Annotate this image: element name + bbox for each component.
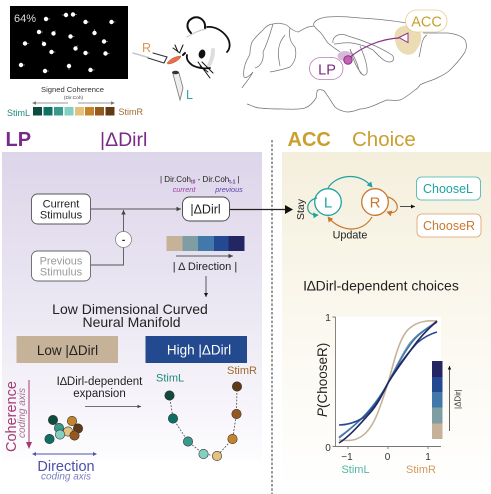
tick labels [325, 313, 431, 463]
formula [160, 175, 243, 194]
stimL label: StimL [341, 464, 370, 476]
signed coherence scale: StimL [7, 108, 30, 118]
manifold title: Neural Manifold [82, 314, 181, 330]
axes [332, 317, 441, 449]
chooseL box: ChooseL [423, 182, 473, 196]
direction axis: coding axis [41, 472, 91, 482]
arrow: current to delta [91, 208, 181, 210]
stay label: Stay [295, 198, 307, 220]
expansion label: I∆Dirl-dependent [57, 376, 143, 388]
curves [339, 321, 437, 443]
coherence axis [4, 380, 32, 452]
signed coherence scale: StimR [118, 107, 144, 117]
panel: ACC background [282, 152, 491, 494]
previous stimulus box: Previous [40, 256, 83, 268]
state R: R [370, 194, 381, 212]
formula: current [173, 185, 196, 194]
high delta box [146, 336, 247, 363]
tick labels: −1 [341, 452, 353, 463]
manifold title: Low Dimensional Curved [52, 301, 208, 317]
delta dir box [182, 197, 230, 221]
state diagram [295, 176, 397, 242]
arrow head into ACC [285, 205, 293, 214]
previous stimulus box [32, 251, 90, 281]
current stimulus box: Stimulus [40, 210, 83, 222]
arrow: direction [176, 255, 233, 257]
heading: delta dir: |ΔDirl [100, 129, 147, 151]
tick labels: 1 [425, 452, 431, 463]
legend arrow [448, 366, 450, 431]
arrow: L self loop [308, 198, 318, 215]
arrow: R self loop [387, 197, 397, 213]
panel: LP background [2, 152, 262, 460]
stimL label: StimL [156, 372, 184, 384]
legend colour bar [432, 361, 442, 439]
low delta box: Low |ΔDirl [37, 343, 98, 358]
LP label: LP [318, 62, 336, 78]
plot background [336, 317, 441, 446]
choices heading: I∆Dirl-dependent choices [303, 278, 459, 294]
heading: LP: LP [6, 129, 31, 151]
heading: Choice: Choice [352, 128, 416, 151]
low delta box [16, 336, 118, 363]
stimR label: StimR [227, 365, 257, 377]
delta dir box: |ΔDirl [190, 202, 221, 216]
expansion label [57, 376, 143, 406]
arrow: to manifold [205, 276, 207, 297]
legend label: |ΔDir| [454, 389, 462, 409]
label: L spout: L [186, 88, 193, 102]
current stimulus box [32, 194, 90, 224]
formula: - Dir.Coh [195, 175, 229, 184]
direction axis: Direction [37, 459, 95, 475]
label: R spout: R [142, 41, 151, 55]
LP to ACC projection [344, 33, 408, 64]
ACC label: ACC [411, 14, 442, 30]
LP label [310, 58, 343, 80]
formula: | Dir.Coh [160, 175, 191, 184]
formula: previous [214, 185, 243, 194]
expansion label: expansion [73, 388, 126, 400]
ACC region [395, 26, 421, 55]
minus node: - [122, 235, 125, 246]
current stimulus box: Current [43, 198, 79, 210]
arrow: to choices [400, 206, 415, 208]
signed coherence scale: (Dir.Coh) [64, 95, 83, 101]
chooseL box [416, 177, 480, 200]
ACC label [406, 10, 447, 32]
coherence axis: Coherence [4, 381, 20, 452]
state L: L [324, 194, 332, 212]
previous stimulus box: Stimulus [40, 266, 83, 278]
chooseR box: ChooseR [423, 219, 475, 233]
tick labels: 1 [325, 313, 331, 324]
tick labels: 0 [385, 452, 391, 463]
heading: ACC: ACC [288, 129, 331, 151]
arrow: L to R [328, 176, 372, 188]
random dot stimulus: 64% [14, 13, 36, 25]
arrow: delta dir to ACC [230, 208, 291, 210]
axis label: P(ChooseR) [315, 343, 330, 417]
formula: t0 [191, 180, 196, 186]
formula: t-1 [229, 180, 236, 186]
stimR label: StimR [406, 464, 436, 476]
coherence axis: coding axis [17, 388, 28, 438]
direction colour bar [166, 236, 244, 251]
direction axis [32, 452, 97, 482]
tick labels: 0 [325, 443, 331, 454]
label: delta direction: | Δ Direction | [173, 261, 237, 273]
update label: Update [333, 230, 367, 242]
icon: mouse with lick spouts [133, 17, 230, 100]
LP region [338, 51, 352, 61]
formula: | [235, 175, 240, 184]
expanded manifold [156, 365, 257, 461]
chooseR box [417, 214, 481, 237]
arrow: R to L [328, 217, 372, 229]
brain outline [242, 17, 466, 112]
high delta box: High |ΔDirl [167, 342, 231, 358]
psychometric chart [315, 313, 462, 476]
manifold title [52, 301, 208, 330]
clustered dots: low delta [45, 415, 83, 444]
dashed divider [271, 140, 273, 494]
brain diagram [242, 10, 466, 112]
minus node [116, 232, 132, 248]
signed coherence scale [7, 85, 144, 118]
arrow: previous to junction [91, 210, 124, 265]
random dot stimulus [10, 6, 128, 79]
signed coherence scale: Signed Coherence [41, 85, 104, 94]
